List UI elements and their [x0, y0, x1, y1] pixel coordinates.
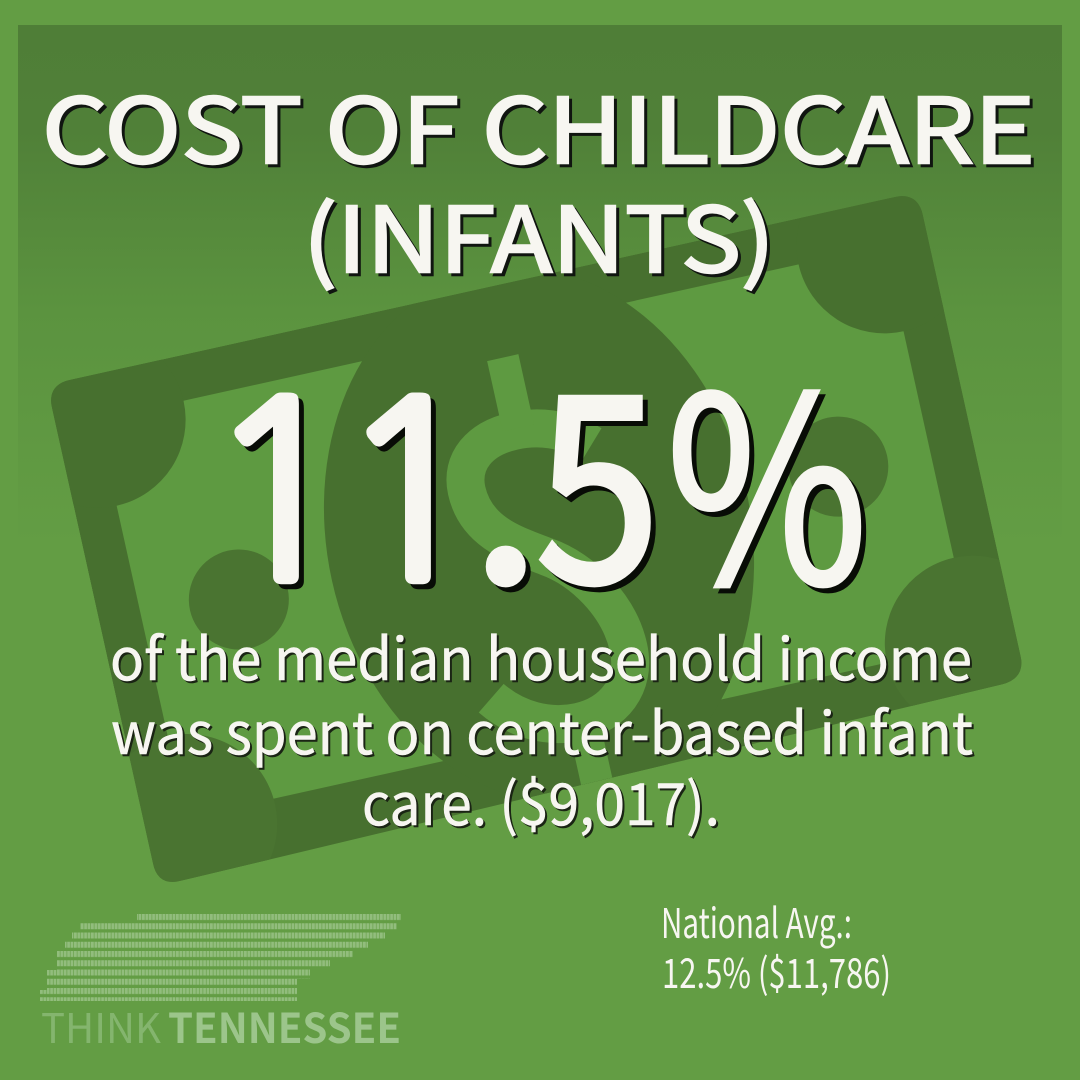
title: COST OF CHILDCARE: [42, 59, 1035, 189]
description text: [110, 613, 973, 842]
national average note: [661, 890, 891, 1000]
big statistic: 11: [204, 370, 484, 615]
icon: dotted Tennessee map: [40, 914, 401, 1001]
description text: was spent on center-based infant: [111, 687, 973, 771]
national average note: National Avg.:: [661, 890, 852, 950]
darker inner panel: [18, 25, 1062, 545]
big statistic: 5: [536, 284, 660, 656]
big statistic: %: [666, 286, 868, 658]
logo wordmark: THINK: [41, 995, 161, 1055]
logo wordmark: [41, 995, 401, 1055]
title: (INFANTS): [303, 168, 775, 298]
icon: dollar bill: [51, 196, 1022, 882]
big statistic: [204, 284, 868, 658]
title: [42, 59, 1035, 298]
national average note: 12.5% ($11,786): [662, 940, 891, 1000]
big statistic: .: [470, 284, 541, 656]
logo wordmark: TENNESSEE: [168, 995, 401, 1055]
description text: of the median household income: [110, 613, 972, 697]
logo: Think Tennessee: [40, 914, 401, 1055]
description text: care. ($9,017).: [362, 758, 720, 842]
